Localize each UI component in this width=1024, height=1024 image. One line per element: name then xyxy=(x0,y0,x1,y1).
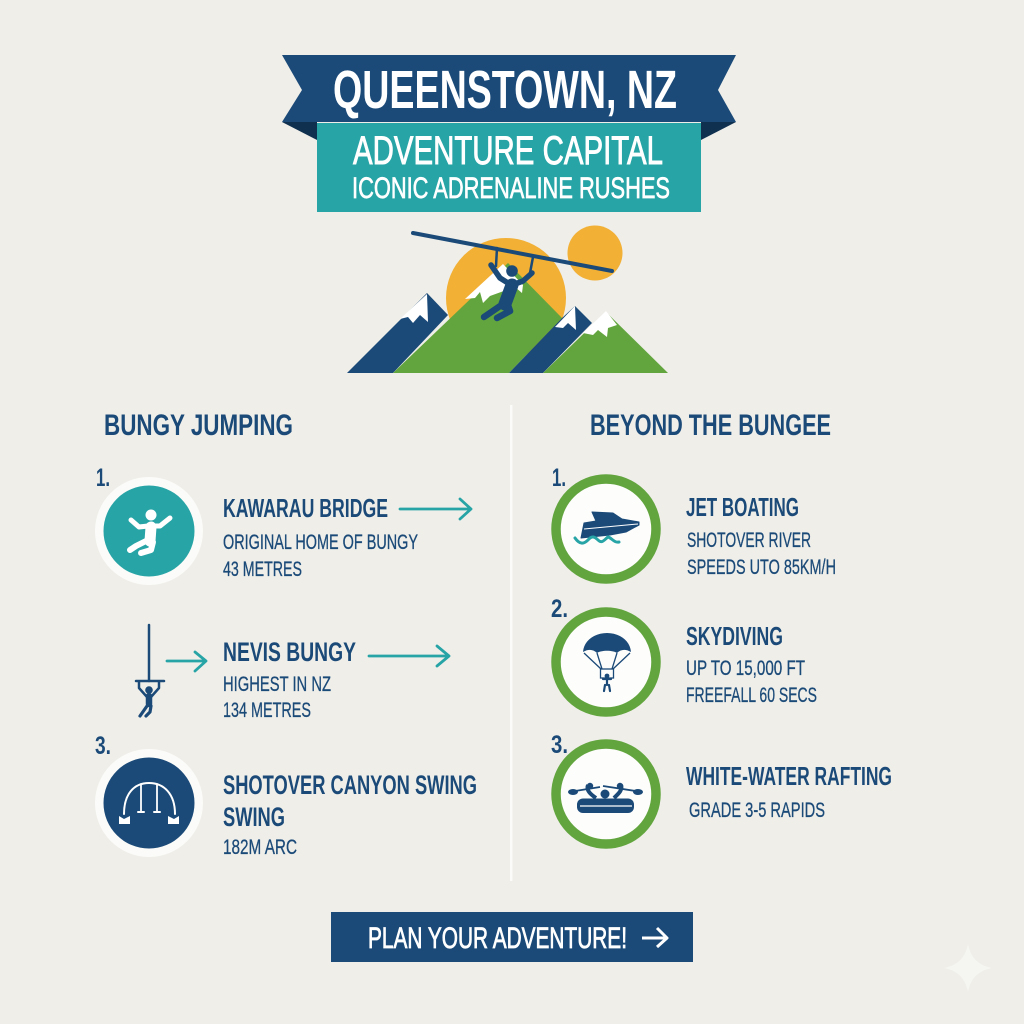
item 3: shotover canyon swing: 3. xyxy=(95,732,111,760)
item 3: shotover canyon swing: SWING xyxy=(223,802,285,832)
item 1: kawarau bridge xyxy=(95,464,471,585)
divider xyxy=(510,405,512,881)
item 2: nevis bungy: NEVIS BUNGY xyxy=(223,637,356,667)
item 1: jet boating: JET BOATING xyxy=(686,492,799,522)
icon: sparkle watermark xyxy=(944,944,992,992)
subtitle: adventure capital: ADVENTURE CAPITAL xyxy=(353,129,663,173)
title: QUEENSTOWN, NZ xyxy=(333,60,677,120)
item 3: shotover canyon swing xyxy=(95,732,477,859)
item 3: white-water rafting xyxy=(551,731,892,844)
item 1: kawarau bridge: 43 METRES xyxy=(223,558,302,581)
item 2: skydiving: UP TO 15,000 FT xyxy=(686,657,805,680)
icon: jumper xyxy=(130,510,170,553)
item 1: kawarau bridge: KAWARAU BRIDGE xyxy=(223,493,388,523)
arrow xyxy=(400,499,471,519)
item 3: white-water rafting: 3. xyxy=(551,731,568,759)
item 1: jet boating xyxy=(552,464,836,579)
arrow xyxy=(369,646,449,666)
icon: jet boat xyxy=(575,512,639,543)
heading: bungy jumping: BUNGY JUMPING xyxy=(104,409,293,442)
zipline rider xyxy=(484,248,533,318)
panel: beyond the bungee xyxy=(551,409,892,844)
item 1: jet boating: SHOTOVER RIVER xyxy=(687,529,811,552)
item 1: kawarau bridge: ORIGINAL HOME OF BUNGY xyxy=(223,531,418,554)
arrow xyxy=(642,928,667,947)
item 1: jet boating: 1. xyxy=(552,464,566,492)
item 2: skydiving: FREEFALL 60 SECS xyxy=(686,684,817,707)
item 2: skydiving xyxy=(551,595,817,712)
icon: parachute xyxy=(583,633,631,691)
item 1: jet boating: SPEEDS UTO 85KM/H xyxy=(687,556,836,579)
subtitle: iconic adrenaline rushes: ICONIC ADRENALINE RUSHES xyxy=(352,172,670,205)
item 1: kawarau bridge: 1. xyxy=(96,464,110,492)
heading: beyond the bungee: BEYOND THE BUNGEE xyxy=(590,409,831,442)
item 3: white-water rafting: WHITE-WATER RAFTING xyxy=(686,761,892,791)
item 2: nevis bungy: HIGHEST IN NZ xyxy=(223,673,331,696)
icon: raft xyxy=(568,783,643,813)
icon: bungy hanger xyxy=(136,625,164,716)
item 2: nevis bungy: 134 METRES xyxy=(223,699,311,722)
call to action button xyxy=(331,912,693,962)
item 2: nevis bungy xyxy=(136,625,449,722)
item 2: skydiving: SKYDIVING xyxy=(686,621,783,651)
item 3: white-water rafting: GRADE 3-5 RAPIDS xyxy=(689,799,825,822)
title banner xyxy=(282,55,736,212)
panel: bungy jumping xyxy=(95,409,477,859)
illustration: zipline over mountains xyxy=(347,226,668,373)
call to action button: PLAN YOUR ADVENTURE! xyxy=(368,922,627,955)
item 3: shotover canyon swing: 182M ARC xyxy=(223,836,297,859)
item 2: skydiving: 2. xyxy=(551,595,568,623)
item 3: shotover canyon swing: SHOTOVER CANYON SWING xyxy=(223,770,477,800)
arrow xyxy=(167,652,206,671)
icon: canyon swing xyxy=(119,783,179,824)
